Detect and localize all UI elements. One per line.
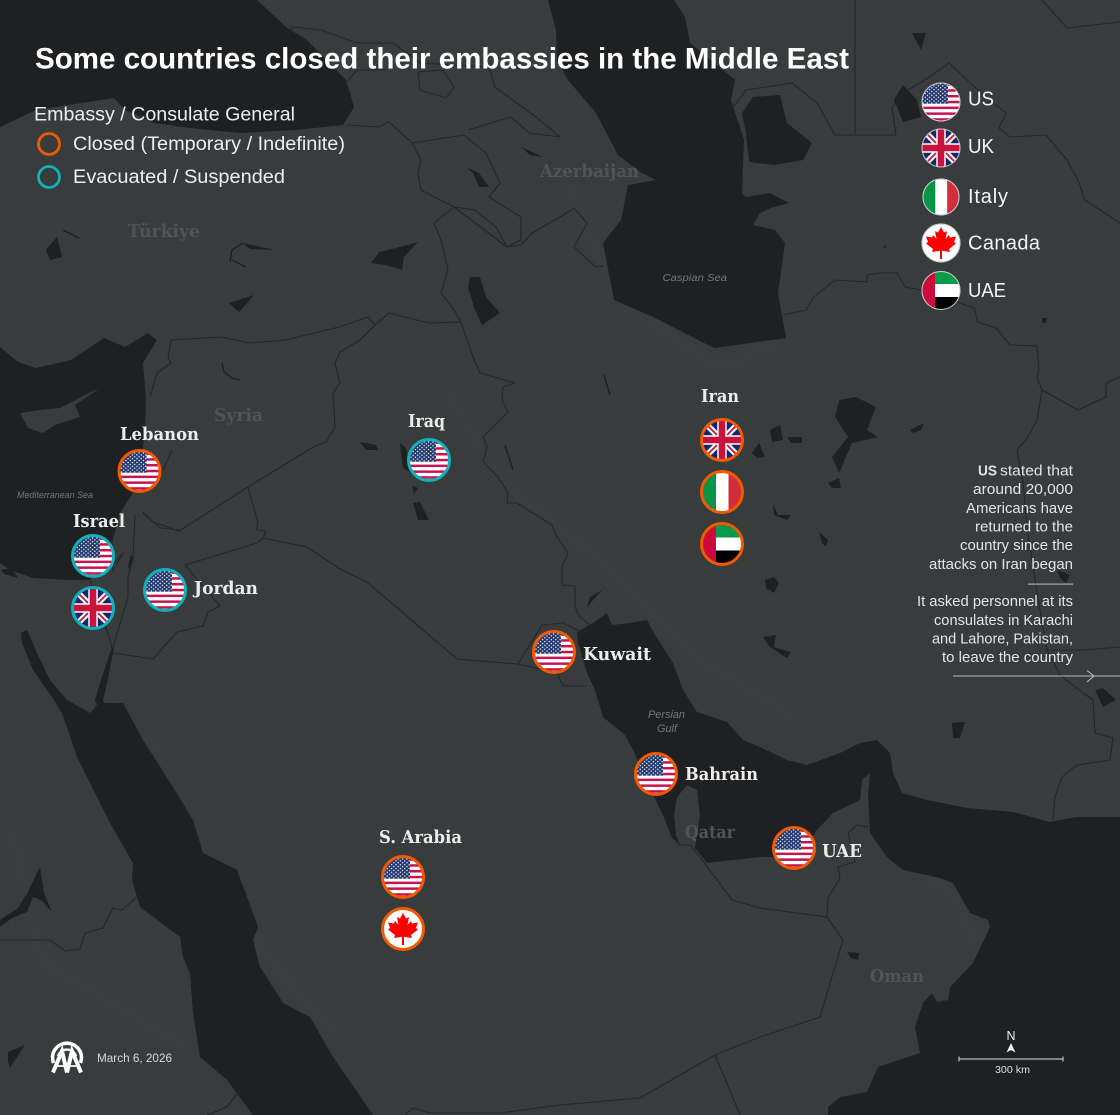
legend: embassy status bbox=[34, 104, 345, 188]
sea: Garabogaz bbox=[742, 95, 812, 165]
callout: US statement bbox=[917, 464, 1074, 666]
marker group: UAE bbox=[774, 828, 862, 868]
callout: US statement: stated that bbox=[1000, 464, 1073, 480]
legend flag: Italy: Italy bbox=[968, 186, 1008, 208]
sea: Persian Gulf, Gulf of Oman and Arabian Sea bbox=[577, 613, 1120, 1115]
marker group: UAE: UAE bbox=[822, 841, 862, 862]
title: Some countries closed their embassies in the Middle East bbox=[35, 42, 849, 76]
callout: US statement: Americans have bbox=[966, 501, 1073, 517]
arrow: callout pointer to Pakistan bbox=[953, 670, 1120, 682]
marker group: Bahrain bbox=[636, 754, 758, 794]
callout: US statement: US bbox=[978, 464, 997, 480]
legend flag: UAE: UAE bbox=[968, 280, 1006, 302]
legend flag: UAE bbox=[921, 270, 1006, 311]
sea labels: Caspian Sea bbox=[662, 272, 727, 284]
sea: Caspian bbox=[548, 0, 789, 348]
sea: Black Sea bbox=[0, 0, 354, 133]
faded country names: Azerbaijan bbox=[539, 161, 639, 182]
marker group: Israel bbox=[72, 511, 125, 628]
legend: country flags bbox=[921, 82, 1041, 311]
callout: US statement: country since the bbox=[960, 538, 1073, 554]
faded country names: Oman bbox=[870, 966, 924, 987]
marker group: Lebanon bbox=[119, 424, 199, 492]
legend item: closed: Closed (Temporary / Indefinite) bbox=[73, 134, 345, 155]
sea labels bbox=[17, 272, 727, 735]
marker group: Kuwait: Kuwait bbox=[583, 644, 652, 665]
marker group: Iran bbox=[701, 386, 742, 564]
scale bar and north arrow: 300 km bbox=[995, 1064, 1030, 1076]
scale bar and north arrow bbox=[959, 1029, 1063, 1076]
callout: US statement: attacks on Iran began bbox=[929, 557, 1073, 573]
sea labels: Gulf bbox=[657, 723, 678, 735]
date: March 6, 2026 bbox=[97, 1053, 172, 1065]
callout: US statement: returned to the bbox=[975, 520, 1073, 536]
marker group: Saudi Arabia: S. Arabia bbox=[379, 827, 462, 848]
faded country names: Syria bbox=[214, 405, 263, 426]
faded country names: Qatar bbox=[685, 822, 735, 843]
marker group: Iran: Iran bbox=[701, 386, 739, 407]
legend item: evacuated: Evacuated / Suspended bbox=[73, 167, 285, 188]
marker group: Lebanon: Lebanon bbox=[120, 424, 199, 445]
callout: US statement: consulates in Karachi bbox=[934, 613, 1073, 629]
legend flag: Canada bbox=[921, 223, 1041, 263]
marker group: Iraq bbox=[408, 411, 450, 480]
sea: Mediterranean bbox=[0, 333, 157, 580]
marker group: Israel: Israel bbox=[73, 511, 125, 532]
rivers and reservoirs bbox=[63, 230, 610, 470]
marker group: Bahrain: Bahrain bbox=[685, 764, 758, 785]
marker group: Iraq: Iraq bbox=[408, 411, 445, 432]
sea: Red Sea and gulfs bbox=[21, 630, 373, 1115]
legend flag: US bbox=[921, 82, 994, 122]
legend flag: UK: UK bbox=[968, 136, 995, 158]
sea labels: Mediterranean Sea bbox=[17, 490, 93, 501]
logo: Anadolu Agency bbox=[53, 1043, 81, 1072]
sea labels: Persian bbox=[648, 709, 685, 721]
legend flag: Italy bbox=[922, 178, 1008, 216]
legend flag: UK bbox=[921, 128, 995, 168]
scale bar and north arrow: N bbox=[1006, 1029, 1016, 1043]
marker group: Jordan bbox=[144, 570, 258, 610]
callout: US statement: and Lahore, Pakistan, bbox=[932, 632, 1073, 648]
callout: US statement: It asked personnel at its bbox=[917, 594, 1073, 610]
legend flag: Canada: Canada bbox=[968, 232, 1041, 254]
faded country names: Türkiye bbox=[128, 221, 200, 242]
legend flag: US: US bbox=[968, 88, 994, 110]
marker group: Jordan: Jordan bbox=[192, 578, 258, 599]
legend: embassy status: Embassy / Consulate General bbox=[34, 104, 295, 126]
faded country names bbox=[128, 161, 924, 987]
marker group: Kuwait bbox=[534, 632, 652, 672]
marker group: Saudi Arabia bbox=[379, 827, 462, 950]
callout: US statement: to leave the country bbox=[942, 650, 1074, 666]
callout: US statement: around 20,000 bbox=[973, 482, 1073, 498]
